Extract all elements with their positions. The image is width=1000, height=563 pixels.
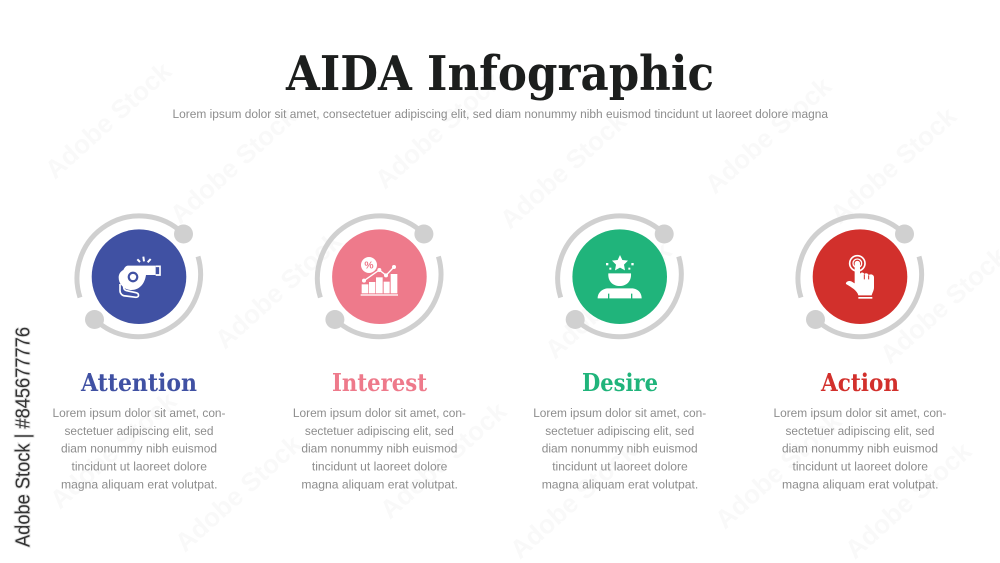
background watermark: Adobe Stock <box>699 70 838 199</box>
panel: attention <box>52 216 226 491</box>
heading: interest: Interest <box>332 368 427 397</box>
background watermark: Adobe Stock <box>824 100 963 229</box>
heading: desire: Desire <box>582 368 658 397</box>
body: interest: Lorem ipsum dolor sit amet, con- <box>293 406 466 420</box>
panel: interest <box>293 216 466 491</box>
icon: pointing hand <box>846 256 874 299</box>
body: desire: Lorem ipsum dolor sit amet, con- <box>533 406 706 420</box>
body: interest <box>293 406 466 491</box>
body: interest: tincidunt ut laoreet dolore <box>312 460 448 474</box>
panel: action <box>774 216 946 491</box>
background watermark: Adobe Stock <box>839 435 978 563</box>
background watermark: Adobe Stock <box>164 100 303 229</box>
body: desire: diam nonummy nibh euismod <box>542 442 698 456</box>
background watermark: Adobe Stock <box>709 405 848 534</box>
icon: chart: % <box>364 261 374 272</box>
body: attention: magna aliquam erat volutpat. <box>61 477 218 491</box>
body: interest: diam nonummy nibh euismod <box>301 442 457 456</box>
panel: desire <box>533 216 706 491</box>
body: action: sectetuer adipiscing elit, sed <box>786 424 935 438</box>
body: action: magna aliquam erat volutpat. <box>782 477 938 491</box>
body: attention: sectetuer adipiscing elit, sed <box>64 424 214 438</box>
subtitle: Lorem ipsum dolor sit amet, consectetuer adipiscing elit, sed diam nonummy nibh euismod tincidunt ut laoreet dolore magna <box>172 107 828 121</box>
body: desire: sectetuer adipiscing elit, sed <box>545 424 694 438</box>
background watermark: Adobe Stock <box>369 65 508 194</box>
body: attention: diam nonummy nibh euismod <box>61 442 217 456</box>
body: interest: sectetuer adipiscing elit, sed <box>305 424 454 438</box>
heading: attention: Attention <box>80 368 197 397</box>
icon: person with star <box>598 255 642 298</box>
ring: desire <box>558 216 681 337</box>
body: attention: tincidunt ut laoreet dolore <box>72 460 207 474</box>
body: attention: Lorem ipsum dolor sit amet, con- <box>52 406 226 420</box>
body: desire: tincidunt ut laoreet dolore <box>552 460 688 474</box>
background watermark: Adobe Stock <box>169 428 308 557</box>
body: interest: magna aliquam erat volutpat. <box>301 477 458 491</box>
background watermark: Adobe Stock <box>494 105 633 234</box>
body: action: Lorem ipsum dolor sit amet, con- <box>774 406 946 420</box>
body: action <box>774 406 946 491</box>
body: desire <box>533 406 706 491</box>
background watermark: Adobe Stock <box>209 225 348 354</box>
ring: interest <box>317 216 441 337</box>
ring: attention <box>77 216 201 337</box>
title: AIDA Infographic <box>285 46 714 102</box>
background watermark: Adobe Stock <box>44 385 183 514</box>
circle: attention <box>92 229 186 324</box>
body: action: tincidunt ut laoreet dolore <box>792 460 928 474</box>
background watermark: Adobe Stock <box>39 55 178 184</box>
icon: chart <box>361 257 398 296</box>
icon: whistle <box>119 257 160 297</box>
circle: desire <box>572 229 667 324</box>
body: attention <box>52 406 226 491</box>
circle: action <box>813 229 907 324</box>
background watermark: Adobe Stock <box>539 235 678 364</box>
heading: action: Action <box>820 368 899 397</box>
stock id vertical text: Adobe Stock | #845677776 <box>12 327 34 547</box>
ring: action <box>798 216 922 337</box>
background watermark: Adobe Stock <box>504 435 643 563</box>
background watermark: Adobe Stock <box>374 395 513 524</box>
circle: interest <box>332 229 427 324</box>
body: action: diam nonummy nibh euismod <box>782 442 938 456</box>
body: desire: magna aliquam erat volutpat. <box>542 477 698 491</box>
